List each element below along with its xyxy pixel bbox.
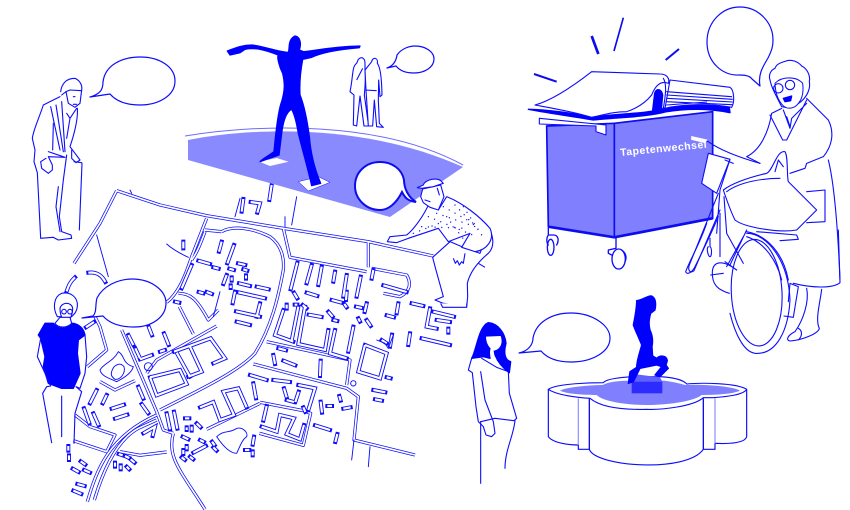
plinth xyxy=(632,374,662,393)
speech bubble: woman with bicycle xyxy=(707,7,773,86)
buildings xyxy=(67,185,454,494)
woman with bicycle xyxy=(686,60,840,353)
trousers and shoes xyxy=(433,228,493,307)
wheels xyxy=(547,227,626,269)
thin map lines and ponds xyxy=(97,190,393,467)
worker leaning over the map xyxy=(387,179,493,307)
speech bubble: old man xyxy=(90,57,175,105)
pedestal plates xyxy=(260,158,330,191)
bicycle wheel and frame xyxy=(686,217,840,353)
statue silhouette xyxy=(628,296,668,383)
speech bubble: map xyxy=(82,279,166,327)
old man with cane xyxy=(32,78,82,240)
head and hat xyxy=(417,179,444,210)
panel: purple plaza under statue xyxy=(185,128,463,217)
young woman with long hair xyxy=(468,323,517,483)
fountain with statue xyxy=(548,296,747,465)
arms and legs xyxy=(37,335,87,443)
speech bubble: couple xyxy=(387,46,434,73)
couple of people talking xyxy=(350,58,383,127)
road network xyxy=(73,191,433,509)
upper body, basket and bag xyxy=(689,60,840,280)
rim xyxy=(548,377,747,409)
speech bubble: young woman xyxy=(519,313,610,362)
attention rays xyxy=(534,18,679,82)
statue silhouette xyxy=(227,36,360,186)
shirt xyxy=(38,323,85,388)
container body xyxy=(539,112,713,237)
blue statue with outstretched arms xyxy=(227,36,360,191)
open book xyxy=(528,72,734,120)
label on the container: Tapetenwechsel xyxy=(620,139,708,159)
hair xyxy=(769,60,810,107)
hair xyxy=(472,323,511,373)
speech bubble: worker xyxy=(355,162,416,210)
dotted shirt and arm xyxy=(387,197,491,252)
map of the neighbourhood xyxy=(67,185,454,509)
body outline xyxy=(468,358,517,483)
head and glasses xyxy=(54,293,77,327)
water xyxy=(560,381,740,405)
woman in dark shirt xyxy=(37,293,87,443)
face xyxy=(486,336,502,351)
waste container with book xyxy=(528,18,734,269)
basin walls xyxy=(548,389,747,465)
face xyxy=(775,78,803,108)
